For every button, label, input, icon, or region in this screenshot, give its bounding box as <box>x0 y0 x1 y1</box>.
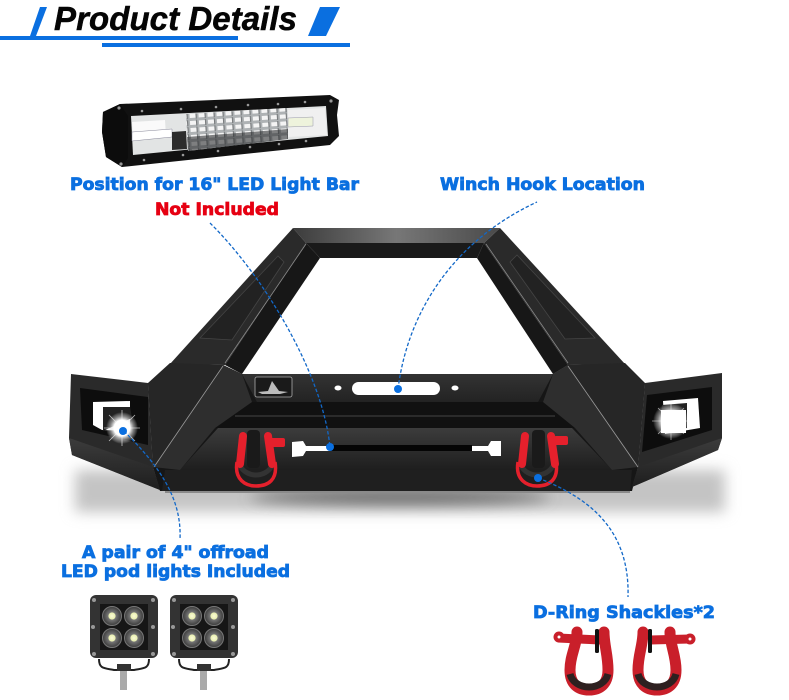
right pod light glow <box>652 402 690 440</box>
bumper right arm <box>477 228 625 374</box>
D-ring shackle product right <box>638 629 696 690</box>
header underline left <box>0 36 238 40</box>
bumper left arm <box>170 228 320 374</box>
label: not included: Not Included <box>155 200 279 219</box>
bumper center plate <box>162 374 632 491</box>
logo badge <box>255 377 292 397</box>
header title: Product Details <box>54 0 297 37</box>
callout line: winch hook <box>398 202 537 389</box>
left pod light glow <box>104 410 140 446</box>
callout dot: light bar <box>326 443 334 451</box>
label: D-ring shackles: D-Ring Shackles*2 <box>533 603 715 622</box>
header: Product Details <box>0 0 350 47</box>
bumper left block <box>148 363 252 470</box>
bumper right block <box>543 363 645 470</box>
callout line: pod lights <box>124 431 180 539</box>
header slash accent <box>30 7 47 36</box>
label: pod lights <box>61 543 290 581</box>
callout dot: pod light <box>119 427 127 435</box>
label: winch hook location: Winch Hook Location <box>440 175 645 194</box>
pod light right <box>170 595 238 690</box>
header underline right <box>102 43 350 47</box>
winch slot and mounting holes <box>334 382 458 395</box>
callout dot: shackle <box>534 474 542 482</box>
pod light left <box>90 595 158 690</box>
bumper top bar <box>293 228 500 258</box>
fairlead slot <box>292 441 501 457</box>
left D-ring shackle <box>237 430 285 486</box>
bumper base silhouette <box>148 365 645 491</box>
label: pod lights: LED pod lights Included <box>61 562 290 581</box>
LED light bar photo <box>102 95 339 167</box>
header parallelogram accent <box>308 7 340 36</box>
D-ring shackle product left <box>554 629 608 690</box>
bumper right wing <box>632 373 722 487</box>
ground shadow <box>75 470 725 512</box>
callout line: shackles <box>538 478 628 597</box>
label: light bar position: Position for 16" LED Light Bar <box>70 175 360 194</box>
bumper left wing <box>69 374 160 490</box>
callout dot: winch <box>394 385 402 393</box>
callout line: light bar <box>210 223 330 447</box>
right D-ring shackle <box>518 430 568 486</box>
label: pod lights: A pair of 4" offroad <box>82 543 269 562</box>
bumper illustration <box>69 228 722 491</box>
